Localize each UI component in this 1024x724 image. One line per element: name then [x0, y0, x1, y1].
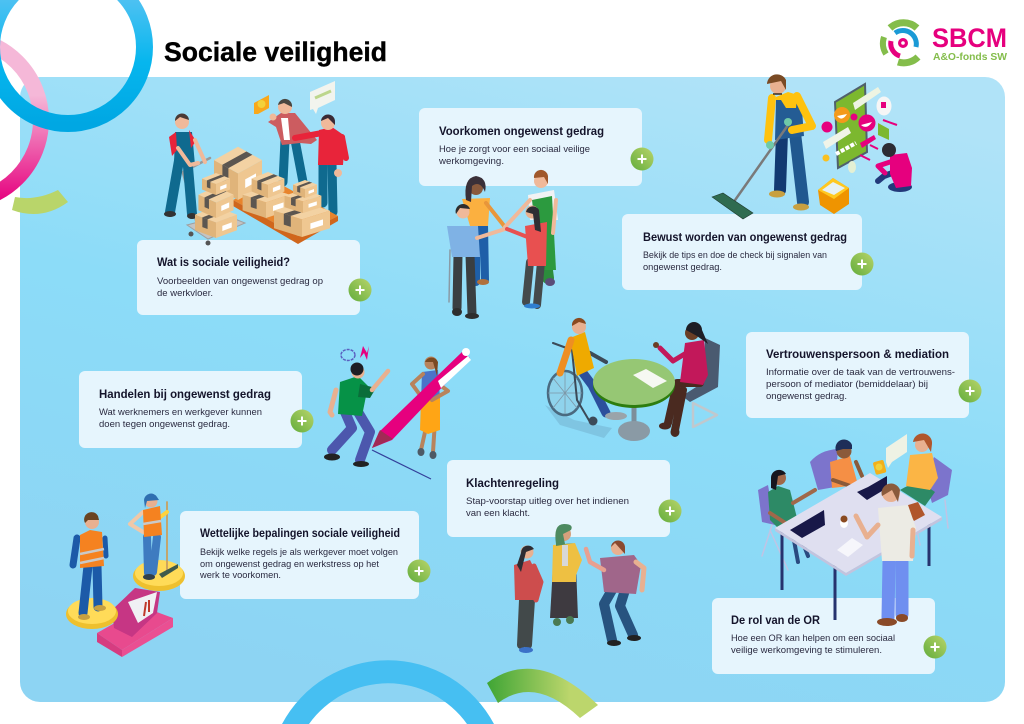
illustration: group shaking hands [447, 170, 558, 319]
card: Vertrouwenspersoon en mediation: ongewenst gedrag. [766, 391, 847, 402]
card: Wettelijke bepalingen: om ongewenst gedrag en werkstress op het [200, 559, 379, 570]
button: plus Voorkomen [630, 148, 654, 170]
card: Vertrouwenspersoon en mediation [746, 332, 969, 418]
decoration: rings top left [0, 0, 144, 214]
card: Klachtenregeling: Stap-voorstap uitleg over het indienen [466, 496, 629, 507]
illustration: colleagues in discussion [514, 524, 644, 653]
card: Voorkomen ongewenst gedrag [419, 108, 642, 186]
card: Wettelijke bepalingen: werk te voorkomen. [199, 570, 281, 581]
button: plus Wettelijke [408, 560, 430, 582]
card: Bewust worden van ongewenst gedrag: Bekijk de tips en doe de check bij signalen van [643, 250, 827, 261]
illustration: man shouting and woman with pen [324, 346, 471, 479]
illustration: warehouse workers with boxes [164, 81, 346, 246]
card: Handelen bij ongewenst gedrag [79, 371, 302, 448]
card: Wettelijke bepalingen: Bekijk welke regels je als werkgever moet volgen [200, 547, 398, 558]
card: Bewust worden van ongewenst gedrag: Bewust worden van ongewenst gedrag [643, 230, 847, 244]
card: Bewust worden van ongewenst gedrag: ongewenst gedrag. [643, 262, 722, 273]
card: Handelen bij ongewenst gedrag: Handelen bij ongewenst gedrag [99, 387, 271, 401]
card: Klachtenregeling [447, 460, 670, 537]
card: De rol van de OR: Hoe een OR kan helpen om een sociaal [731, 633, 895, 644]
card: Vertrouwenspersoon en mediation: persoon of mediator (bemiddelaar) bij [766, 379, 928, 390]
button: plus Wat is sociale veiligheid [348, 278, 372, 302]
card: Vertrouwenspersoon en mediation: Informatie over de taak van de vertrouwens- [766, 367, 955, 378]
logo SBCM [883, 23, 1007, 63]
button: plus Klachtenregeling [658, 500, 682, 522]
title: Sociale veiligheid [164, 37, 387, 67]
button: plus De rol van de OR [924, 636, 946, 658]
button: plus Handelen [290, 410, 314, 432]
card: Voorkomen ongewenst gedrag: Voorkomen ongewenst gedrag [439, 124, 604, 138]
card: Klachtenregeling: van een klacht. [466, 508, 530, 519]
card: Bewust worden van ongewenst gedrag [622, 214, 862, 290]
card: Wat is sociale veiligheid: Wat is sociale veiligheid? [157, 255, 290, 269]
logo SBCM: SBCM [932, 23, 1007, 53]
card: De rol van de OR [712, 598, 935, 674]
button: plus Bewust worden [850, 252, 874, 276]
card: Klachtenregeling: Klachtenregeling [466, 476, 559, 490]
card: Vertrouwenspersoon en mediation: Vertrouwenspersoon & mediation [766, 347, 949, 361]
logo SBCM: A&O-fonds SW [933, 51, 1007, 63]
card: Handelen bij ongewenst gedrag: doen tegen ongewenst gedrag. [99, 419, 230, 430]
illustration: cleaner with mop and phone [712, 74, 912, 219]
card: Wat is sociale veiligheid: Voorbeelden van ongewenst gedrag op [157, 276, 323, 287]
card: Voorkomen ongewenst gedrag: werkomgeving. [438, 156, 504, 167]
card: Wettelijke bepalingen [180, 511, 419, 599]
card: De rol van de OR: veilige werkomgeving te stimuleren. [731, 645, 882, 656]
card: Voorkomen ongewenst gedrag: Hoe je zorgt voor een sociaal veilige [439, 144, 590, 155]
card: Wettelijke bepalingen: Wettelijke bepalingen sociale veiligheid [200, 526, 400, 540]
card: Handelen bij ongewenst gedrag: Wat werknemers en werkgever kunnen [99, 407, 262, 418]
card: De rol van de OR: De rol van de OR [731, 613, 820, 627]
decoration: rings bottom [282, 660, 598, 724]
illustration: wheelchair meeting at round table [545, 318, 720, 441]
illustration: people on scales [66, 494, 185, 657]
card: Wat is sociale veiligheid: de werkvloer. [157, 288, 213, 299]
button: plus Vertrouwenspersoon [958, 380, 982, 402]
illustration: team around a table [758, 433, 952, 626]
card: Wat is sociale veiligheid [137, 240, 360, 315]
